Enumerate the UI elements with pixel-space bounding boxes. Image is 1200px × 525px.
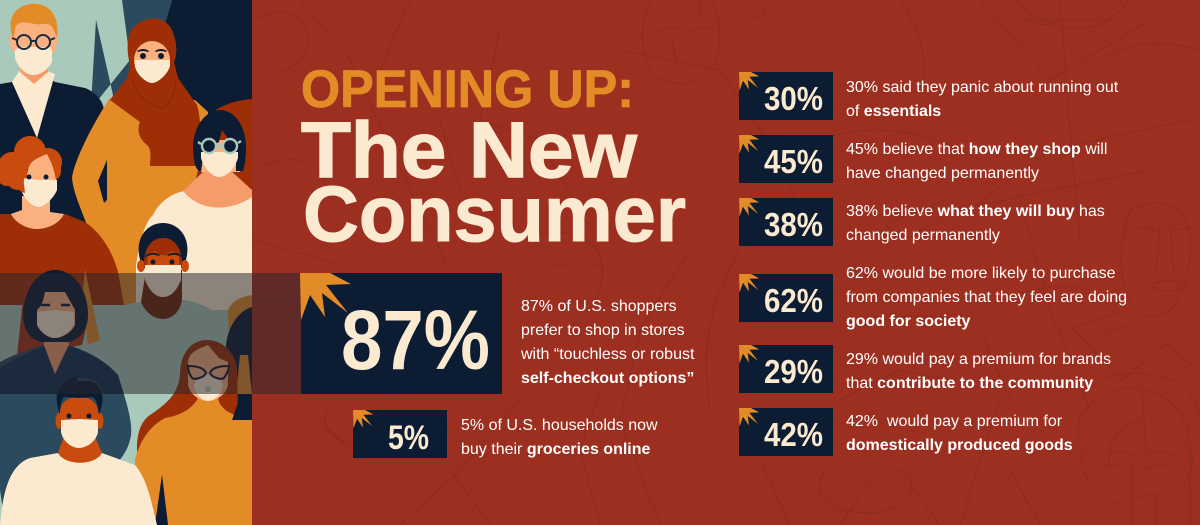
stat: 87 percent <box>300 273 695 394</box>
stat: 5 percent: 5% of U.S. households now <box>461 417 658 434</box>
stat: 29 percent <box>739 345 1111 393</box>
stat: 87 percent: 87% of U.S. shoppers <box>521 298 677 315</box>
stat: 62 percent <box>739 265 1127 330</box>
stat: 42 percent <box>739 408 1073 456</box>
stat: 5 percent <box>353 410 658 458</box>
stat: 87 percent: 87% <box>341 293 490 387</box>
translucent band <box>0 273 301 394</box>
stat: 45 percent: 45% <box>764 143 823 180</box>
person: woman with bob and grey mask <box>0 270 131 525</box>
person: man in cream sweater <box>0 376 157 525</box>
stat: 29 percent: 29% would pay a premium for brands <box>846 351 1111 368</box>
person: woman with curly red hair <box>0 136 124 305</box>
stat: 29 percent: 29% <box>764 353 823 390</box>
stat: 45 percent <box>739 135 1107 183</box>
title <box>301 60 686 258</box>
backdrop <box>0 0 252 525</box>
person: man with afro <box>124 223 211 319</box>
stat: 87 percent: prefer to shop in stores <box>521 322 685 339</box>
person: man with glasses <box>0 4 104 138</box>
stat: 62 percent: from companies that they feel are doing <box>846 289 1127 306</box>
person: woman with glasses and black bob <box>136 99 252 310</box>
stat: 45 percent: have changed permanently <box>846 165 1039 182</box>
stat: 38 percent: 38% believe what they will buy has <box>846 203 1105 220</box>
person: woman in hijab <box>72 18 208 305</box>
stat: 30 percent: of essentials <box>846 103 941 120</box>
stat: 5 percent: buy their groceries online <box>461 441 650 458</box>
blouse shade inside band <box>0 346 124 394</box>
stat: 87 percent: with “touchless or robust <box>520 346 695 363</box>
stat: 30 percent <box>739 72 1119 120</box>
stat: 30 percent: 30% <box>764 80 823 117</box>
stat: 38 percent: 38% <box>764 206 823 243</box>
stat: 42 percent: 42% would pay a premium for <box>846 413 1063 430</box>
title: consumer: Consumer <box>303 169 686 258</box>
stat: 87 percent: self-checkout options” <box>521 370 694 387</box>
stat: 62 percent: 62% would be more likely to purchase <box>846 265 1116 282</box>
title: the new: The New <box>301 105 638 194</box>
stat: 62 percent: 62% <box>764 282 823 319</box>
stat: 42 percent: domestically produced goods <box>846 437 1073 454</box>
person: woman with long hair and respirator <box>135 340 252 525</box>
background line-art pattern <box>252 0 1200 525</box>
stat: 29 percent: that contribute to the community <box>846 375 1093 392</box>
stat: 30 percent: 30% said they panic about running out <box>846 79 1119 96</box>
stat: 38 percent <box>739 198 1105 246</box>
stat: 62 percent: good for society <box>846 313 971 330</box>
stat: 38 percent: changed permanently <box>846 227 1000 244</box>
background figures right of crowd <box>226 295 252 420</box>
title: opening up: OPENING UP: <box>301 60 634 119</box>
stat: 42 percent: 42% <box>764 416 823 453</box>
stat: 5 percent: 5% <box>388 419 429 457</box>
stat: 45 percent: 45% believe that how they shop will <box>846 141 1107 158</box>
illustration: masked crowd <box>0 0 252 525</box>
